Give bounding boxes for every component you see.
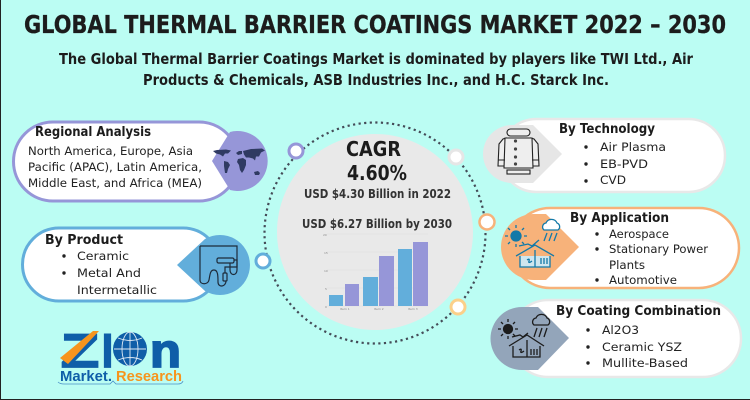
logo: Zion Market Research: Research	[116, 368, 182, 385]
application list: Plants	[609, 258, 645, 272]
technology list: Air Plasma	[600, 140, 666, 154]
product list: Metal And	[77, 266, 141, 280]
panel: regional analysis	[14, 122, 268, 201]
panel: by product	[22, 228, 250, 301]
icon: jacket	[483, 125, 562, 183]
heading: Regional Analysis	[35, 125, 151, 140]
CAGR value: 4.60%	[347, 161, 407, 185]
coating list	[586, 323, 688, 370]
product list	[62, 249, 157, 297]
heading: By Coating Combination	[556, 304, 721, 319]
icon: house with sun and rain	[501, 214, 579, 280]
node: grey	[449, 150, 463, 164]
logo tagline: Market.	[60, 368, 112, 385]
logo wordmark: Z	[61, 324, 99, 377]
bar chart: Item 2	[374, 307, 384, 311]
dotted ring	[264, 122, 486, 344]
panel: by application	[501, 208, 739, 288]
grey disc	[277, 134, 473, 330]
logo: Zion Market Research	[58, 324, 183, 385]
application list: Aerospace	[609, 227, 669, 241]
coating list: Al2O3	[602, 323, 639, 337]
2030 value: USD $6.27 Billion by 2030	[302, 216, 452, 231]
bar chart	[323, 233, 428, 311]
application list: Stationary Power	[609, 242, 708, 256]
application list	[595, 227, 708, 287]
icon: house with sun and rain dark	[491, 307, 569, 370]
logo: Zion Market Research: I	[102, 324, 113, 377]
technology list: EB-PVD	[600, 157, 648, 171]
technology list: CVD	[600, 173, 626, 187]
panel: by technology	[483, 119, 725, 192]
bar chart: Item 3	[408, 307, 418, 311]
heading: By Product	[45, 233, 123, 248]
node: orange	[480, 214, 494, 230]
heading: By Technology	[559, 122, 655, 137]
panel: by coating combination	[491, 300, 741, 377]
logo: Zion Market Research: n	[150, 324, 181, 377]
node: blue	[256, 254, 270, 268]
regions text	[28, 144, 202, 190]
subtitle	[59, 50, 693, 89]
bar chart: 10	[324, 269, 328, 273]
2022 value: USD $4.30 Billion in 2022	[304, 186, 451, 201]
bar chart: 5	[325, 287, 327, 291]
icon: world map	[212, 131, 268, 191]
product list: Ceramic	[77, 249, 129, 263]
regions text: North America, Europe, Asia	[28, 144, 193, 158]
heading: By Application	[570, 211, 669, 226]
bar chart: 0	[325, 305, 327, 309]
coating list: Mullite-Based	[602, 356, 688, 370]
CAGR heading: CAGR	[346, 137, 401, 161]
node: lavender	[289, 144, 303, 158]
application list: Automotive	[609, 273, 677, 287]
technology list	[584, 140, 666, 187]
bar chart: Item 1	[340, 307, 350, 311]
subtitle: Products & Chemicals, ASB Industries Inc., and H.C. Starck Inc.	[143, 71, 609, 89]
coating list: Ceramic YSZ	[602, 340, 682, 354]
bar chart: 20	[323, 233, 327, 237]
node: yellow	[451, 300, 465, 314]
logo globe	[113, 332, 147, 366]
regions text: Pacific (APAC), Latin America,	[28, 160, 202, 174]
bar chart: 15	[324, 251, 328, 255]
icon: paint roller	[177, 235, 250, 295]
panel: center circle	[264, 122, 486, 344]
product list: Intermetallic	[77, 283, 157, 297]
regions text: Middle East, and Africa (MEA)	[28, 176, 202, 190]
